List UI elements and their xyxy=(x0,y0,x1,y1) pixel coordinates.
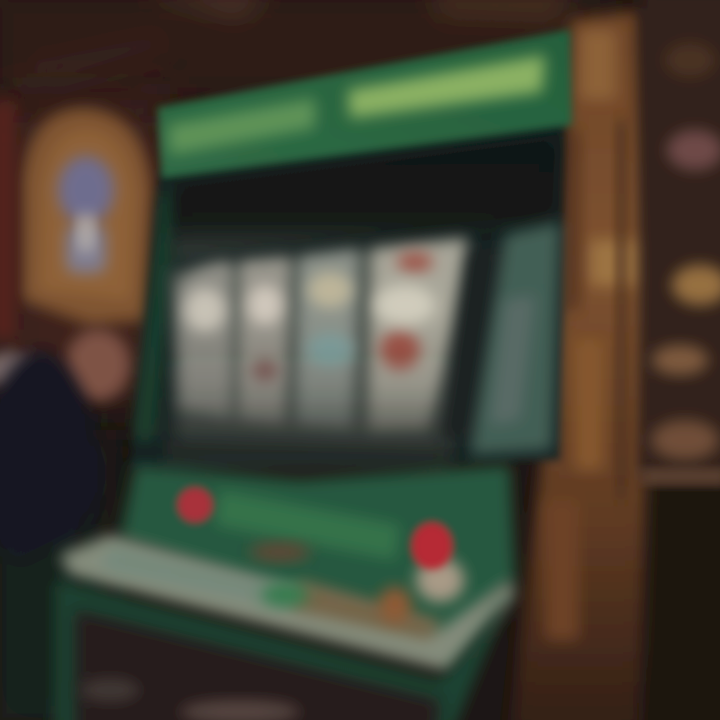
control panel shelf xyxy=(60,535,515,672)
red button right xyxy=(411,522,464,602)
dark divider and right panel xyxy=(440,245,515,440)
lamp glow and figure at left xyxy=(0,329,130,560)
ceiling beams xyxy=(20,0,570,90)
sign glow left xyxy=(168,98,315,155)
machine base front xyxy=(55,580,510,720)
slot machine xyxy=(55,30,572,720)
sign glow right xyxy=(348,55,545,118)
reel 4 xyxy=(368,240,466,432)
lower green control panel xyxy=(120,465,515,650)
stained glass arch window xyxy=(0,100,152,340)
reels panel xyxy=(170,238,470,450)
machine body xyxy=(130,120,565,470)
dark reel hood xyxy=(172,135,560,260)
reel fade to shadow xyxy=(165,320,470,470)
reel 2 xyxy=(238,258,290,425)
red button left xyxy=(177,487,213,523)
shelves at right xyxy=(640,0,720,484)
left green side edge xyxy=(134,190,178,440)
wooden column xyxy=(510,10,650,720)
reel symbols xyxy=(185,252,435,381)
reel 3 xyxy=(296,250,358,430)
reel 1 xyxy=(178,262,232,420)
green sign panel xyxy=(158,30,572,178)
